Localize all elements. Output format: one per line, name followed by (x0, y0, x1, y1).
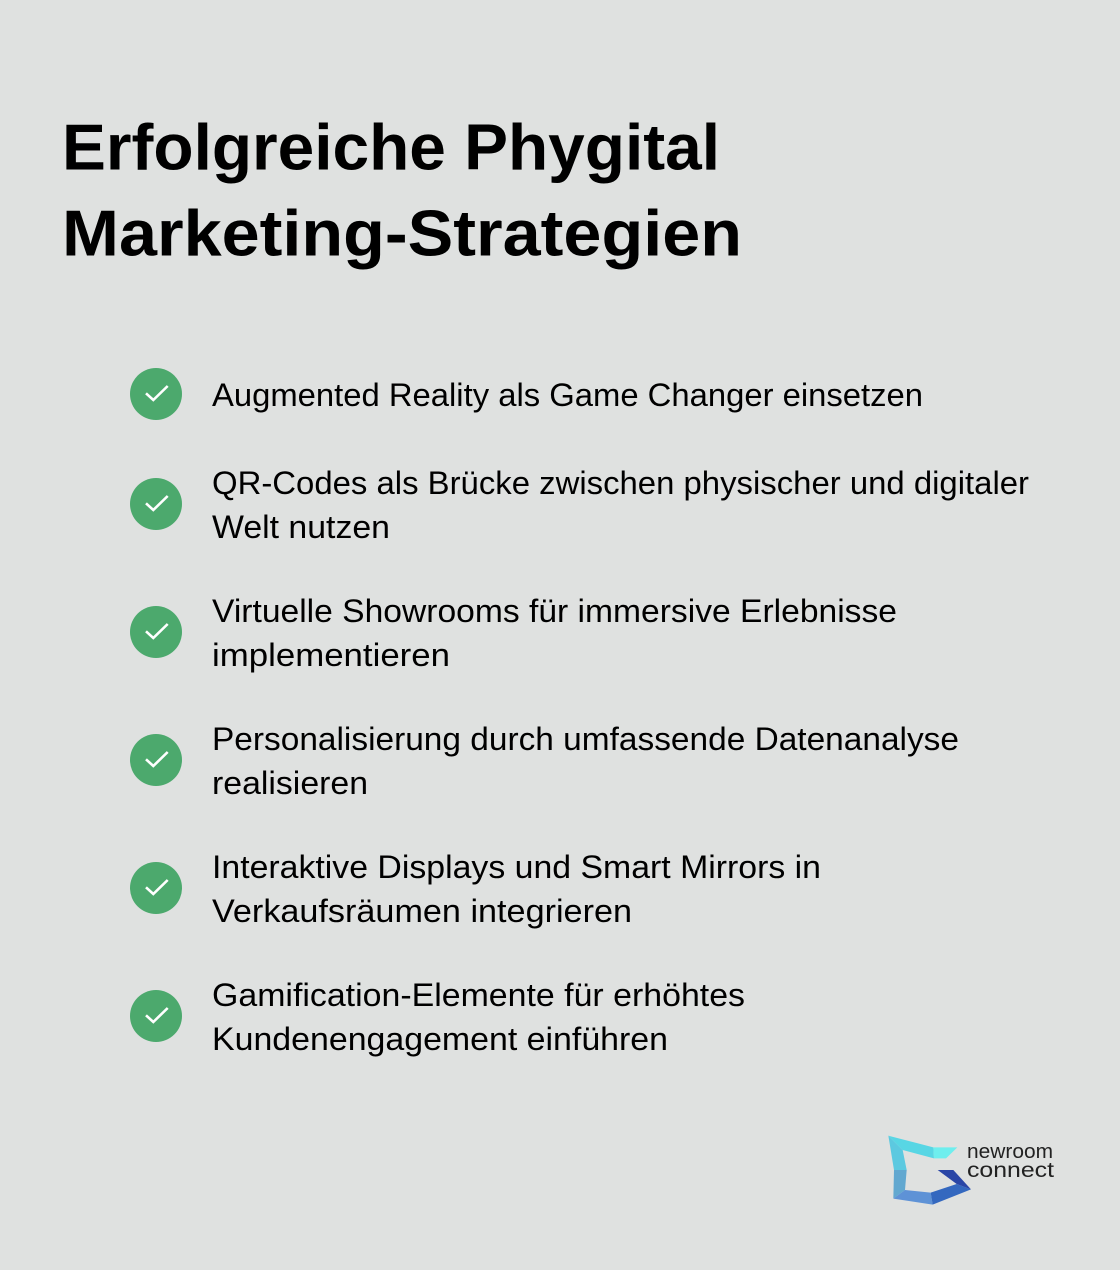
item: gamification (130, 977, 745, 1057)
item text: Interaktive Displays und Smart Mirrors in (212, 849, 821, 885)
icon: check circle (130, 478, 182, 530)
item text: Personalisierung durch umfassende Datenanalyse (212, 721, 959, 757)
icon: check circle (130, 368, 182, 420)
logo text: newroom (967, 1141, 1053, 1163)
item text: Verkaufsräumen integrieren (212, 893, 632, 929)
item text (212, 721, 959, 801)
item text: Virtuelle Showrooms für immersive Erlebnisse (212, 593, 897, 629)
item text: realisieren (212, 765, 368, 801)
icon: check circle (130, 734, 182, 786)
icon: logo mark (888, 1136, 971, 1205)
item text (212, 977, 745, 1057)
logo text (967, 1141, 1054, 1182)
item: virtual showrooms (130, 593, 897, 673)
title: Erfolgreiche Phygital (62, 110, 720, 184)
item text: Welt nutzen (212, 509, 390, 545)
item text: implementieren (212, 637, 450, 673)
item: personalisation (130, 721, 959, 801)
item: augmented reality (130, 368, 923, 420)
item: interactive displays (130, 849, 821, 929)
logo text: connect (967, 1159, 1054, 1182)
item: QR codes (130, 465, 1029, 545)
icon: check circle (130, 990, 182, 1042)
title: Marketing-Strategien (62, 196, 742, 270)
item text: Kundenengagement einführen (212, 1021, 668, 1057)
item text: Augmented Reality als Game Changer einsetzen (212, 377, 923, 413)
item text (212, 465, 1029, 545)
checklist (130, 368, 1029, 1057)
icon: check circle (130, 862, 182, 914)
item text: Gamification-Elemente für erhöhtes (212, 977, 745, 1013)
title (62, 110, 742, 270)
item text (212, 849, 821, 929)
logo: newroom connect (888, 1136, 1054, 1205)
icon: check circle (130, 606, 182, 658)
item text (212, 593, 897, 673)
item text: QR-Codes als Brücke zwischen physischer und digitaler (212, 465, 1029, 501)
